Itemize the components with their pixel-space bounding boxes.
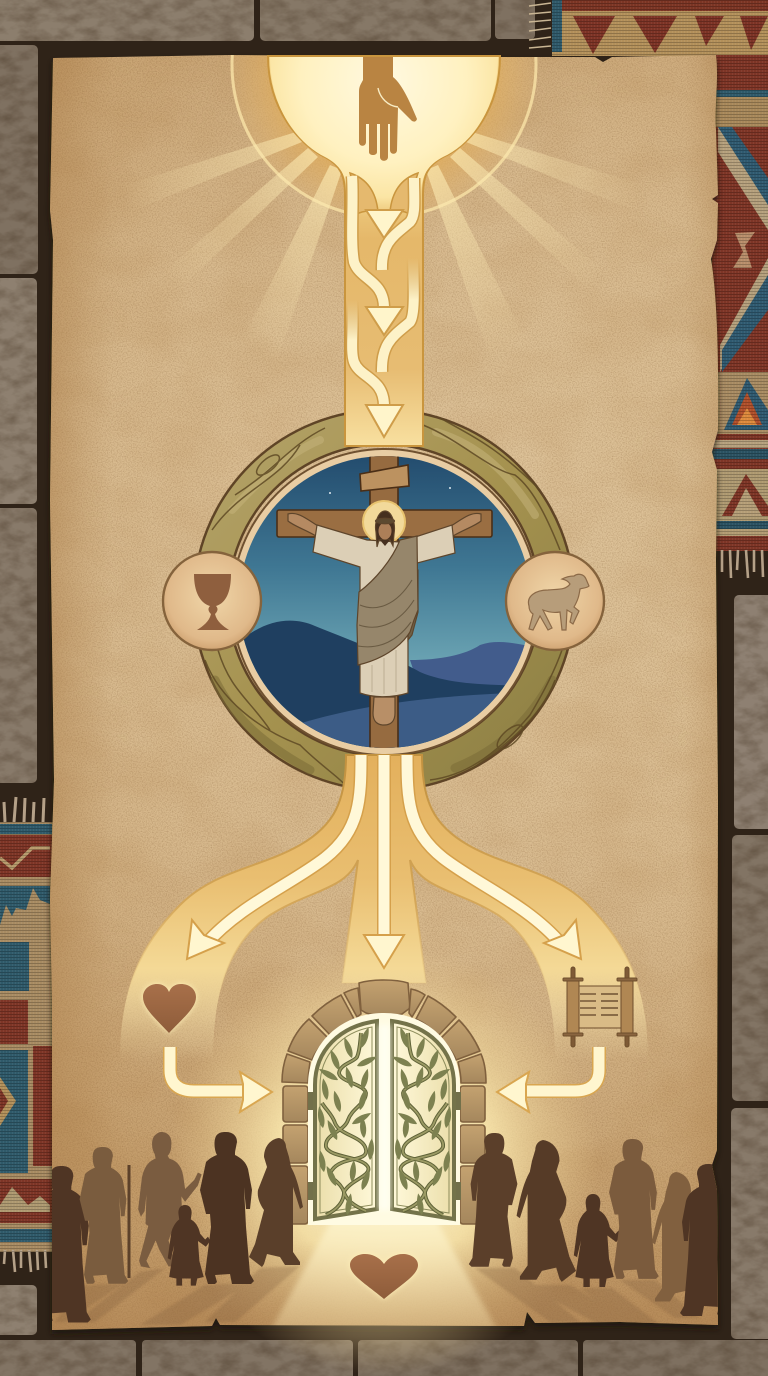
floor light and shadows xyxy=(52,1225,718,1330)
stone arch xyxy=(282,980,486,1224)
people on the right xyxy=(469,1133,734,1316)
stream arrowheads xyxy=(187,920,581,968)
calvary scene xyxy=(244,456,526,748)
hand crease xyxy=(378,88,398,107)
person: man in robe xyxy=(200,1132,254,1284)
wood grain xyxy=(205,418,562,785)
tapestry: right strip xyxy=(712,55,768,578)
tapestry: left strip xyxy=(0,797,54,1272)
icon: scroll xyxy=(563,967,637,1047)
horn right xyxy=(390,173,418,215)
person: small girl xyxy=(168,1205,210,1286)
arrowheads xyxy=(366,210,403,437)
halo ring xyxy=(230,55,538,214)
wood tonal bands xyxy=(215,432,552,770)
person: standing man xyxy=(609,1139,659,1279)
stream stripes xyxy=(205,755,562,945)
person: woman walking xyxy=(249,1138,303,1267)
top funnel: bulb and column xyxy=(268,56,500,446)
person: veiled woman xyxy=(517,1140,576,1282)
person: man gesturing xyxy=(138,1132,202,1268)
lower glow behind gate xyxy=(169,945,599,1375)
light inside the arch xyxy=(308,1013,460,1225)
arrow: scroll to gate xyxy=(497,1047,599,1112)
arrow: heart to gate xyxy=(170,1047,272,1112)
people on the left xyxy=(35,1132,303,1323)
left door leaf xyxy=(315,1021,378,1219)
lower branching streams xyxy=(120,755,648,1060)
tapestry: top right xyxy=(529,0,768,56)
stars xyxy=(329,487,451,494)
medallion: chalice xyxy=(163,552,261,650)
icon: heart left xyxy=(143,984,196,1033)
lamb icon xyxy=(528,574,589,630)
right door leaf xyxy=(391,1021,454,1219)
person: man with headcloth xyxy=(469,1133,517,1267)
cream inner band xyxy=(232,449,538,755)
hand icon xyxy=(359,57,417,161)
cross xyxy=(277,447,492,757)
person: veiled woman far right xyxy=(652,1172,706,1304)
chalice icon xyxy=(194,574,231,630)
medallion: lamb xyxy=(506,552,604,650)
person: child xyxy=(574,1194,621,1287)
hills xyxy=(244,620,524,748)
central light between doors xyxy=(379,1025,390,1210)
sky xyxy=(244,456,526,748)
person: edge figure xyxy=(680,1164,718,1316)
horn left xyxy=(350,173,378,215)
light rays from the hand xyxy=(154,132,612,323)
icon: heart bottom xyxy=(350,1254,418,1299)
person: far left xyxy=(52,1166,91,1322)
gate xyxy=(282,980,486,1225)
halo xyxy=(363,501,405,543)
hinges xyxy=(308,1092,461,1200)
wood ring xyxy=(205,418,562,785)
braided streams xyxy=(352,176,414,406)
figure of Christ xyxy=(288,511,481,725)
person: man with staff xyxy=(80,1147,130,1284)
